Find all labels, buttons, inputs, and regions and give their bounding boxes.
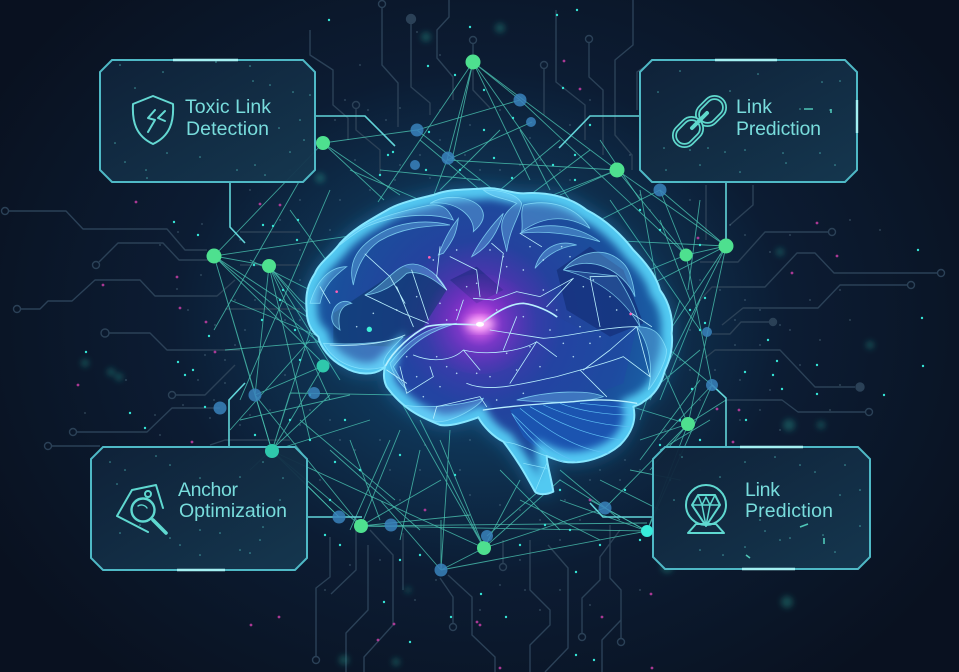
heading: link prediction: Prediction	[736, 118, 821, 140]
dim glowing dots	[81, 23, 874, 666]
icon: shield	[133, 96, 173, 144]
network nodes	[206, 54, 734, 576]
panel connectors	[229, 116, 726, 517]
green nodes	[206, 54, 734, 555]
heading: link prediction	[745, 479, 833, 522]
heading: link prediction: Link	[736, 96, 772, 118]
brain outline	[306, 188, 672, 494]
brain body	[306, 188, 672, 494]
teal nodes	[265, 360, 330, 458]
heading: anchor optimization: Anchor	[178, 479, 238, 501]
heading: link prediction	[736, 96, 821, 140]
heading: anchor optimization: Optimization	[179, 500, 287, 522]
icon: tag with magnifier	[117, 485, 166, 533]
panel: link prediction bottom	[653, 447, 870, 569]
heading: link prediction: Link	[745, 479, 780, 501]
brain glow	[306, 188, 672, 492]
scattered particles: small faint	[85, 32, 880, 610]
cyan node	[641, 525, 653, 537]
brain folds: light crescents	[310, 190, 667, 422]
brain core spark	[466, 318, 494, 331]
blue nodes	[214, 94, 718, 576]
heading: toxic link detection: Detection	[186, 118, 269, 140]
cerebellum	[503, 403, 633, 492]
brain fissure lines	[320, 233, 652, 418]
icon: diamond in globe	[686, 485, 726, 533]
brain	[306, 188, 672, 494]
network lines	[214, 62, 726, 570]
scattered particles: magenta	[78, 61, 837, 668]
panel accent marks	[804, 109, 831, 113]
panel: link prediction top	[640, 60, 857, 182]
panel: toxic link detection	[100, 60, 315, 182]
heading: toxic link detection: Toxic Link	[185, 96, 271, 118]
panel: anchor optimization	[91, 447, 307, 570]
brain interior shading	[306, 188, 672, 494]
icon: chain links	[670, 93, 729, 150]
heading: link prediction: Prediction	[745, 500, 833, 522]
heading: toxic link detection	[185, 96, 271, 140]
heading: anchor optimization	[178, 479, 287, 522]
brain particles	[357, 247, 617, 400]
